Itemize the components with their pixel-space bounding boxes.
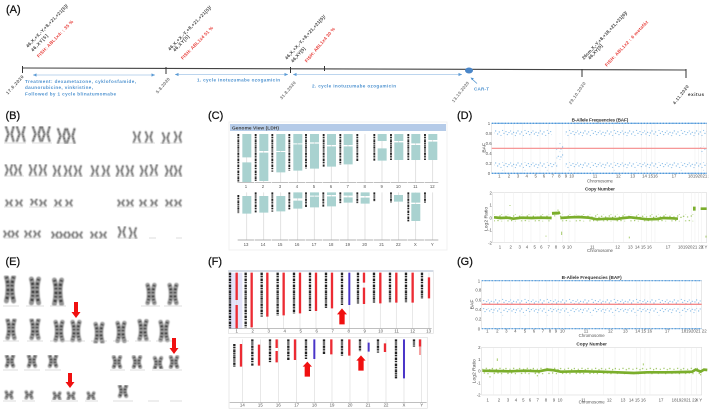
upper genome strip: 12 — [410, 328, 416, 333]
red arrow: group 8 — [72, 302, 80, 318]
BAF plot: 1 — [486, 328, 489, 333]
BAF plot: 4 — [525, 174, 528, 179]
copy number plot: 1 — [499, 245, 502, 250]
chromosome numbers: 8 — [363, 184, 366, 189]
genome view title: Genome View (LDH) — [232, 126, 279, 132]
BAF plot: 0.2 — [475, 317, 482, 322]
BAF plot: 0.4 — [475, 307, 482, 312]
copy number plot: 3 — [507, 397, 510, 402]
chromosome numbers: 22 — [396, 242, 401, 247]
chromosome numbers: 4 — [296, 184, 299, 189]
copy number plot: 13 — [628, 245, 633, 250]
BAF plot: 2 — [508, 174, 511, 179]
chromosome numbers: 18 — [329, 242, 334, 247]
chromosome numbers: 16 — [295, 242, 300, 247]
copy number plot: 7 — [536, 397, 539, 402]
karyotype and FISH note 1: FISH: ABL1x4: : 35 % — [36, 19, 74, 59]
BAF plot: 1 — [488, 121, 491, 126]
lower genome strip: 16 — [276, 402, 281, 407]
treatment text — [25, 79, 136, 96]
BAF plot: 0 — [478, 326, 481, 331]
timeline dates — [5, 74, 690, 105]
copy number plot: 9 — [553, 397, 556, 402]
BAF plot: 0.6 — [475, 297, 482, 302]
copy number plot: -2 — [477, 393, 481, 398]
copy number plot: 0 — [489, 215, 492, 220]
red arrow: chromosome 18 — [303, 362, 312, 377]
red arrow: group 21 — [66, 373, 74, 388]
copy number plot: Y — [699, 397, 702, 402]
lower genome strip: 20 — [348, 402, 353, 407]
upper genome strip — [228, 270, 433, 333]
teal copy number blocks — [242, 134, 437, 221]
lower genome strip — [229, 337, 427, 408]
BAF plot: 0.6 — [486, 141, 492, 146]
karyotype and FISH note 4: 26cm,X,-Y,+8,+18,+21,+21[6]/ — [581, 10, 629, 61]
karyotype and FISH note 1: 46,XY[5] — [30, 33, 49, 53]
genome view frame — [229, 122, 447, 250]
copy number plot: Log2 Ratio — [483, 207, 489, 231]
copy number plot: 12 — [615, 245, 621, 250]
copy number plot: 10 — [567, 245, 572, 250]
karyotype and FISH note 4 — [581, 10, 650, 68]
copy number plot: 7 — [547, 245, 550, 250]
chromosome numbers: X — [414, 242, 417, 247]
timeline dates: 17.6.2020 — [5, 74, 25, 95]
copy number plot: 6 — [540, 245, 543, 250]
karyogram baselines — [4, 143, 182, 238]
copy number plot: Chromosome — [579, 400, 605, 405]
cycle 1 label: 1. cycle inotuzumabe ozogamicin — [197, 78, 280, 82]
timeline dates: 13.10.2020 — [451, 80, 470, 103]
karyogram baselines — [3, 306, 182, 401]
BAF plot: 3 — [517, 174, 520, 179]
chromosome row 1 — [6, 277, 176, 304]
BAF plot: Chromosome — [579, 333, 605, 338]
BAF plot — [469, 275, 707, 338]
chromosome numbers: 7 — [346, 184, 349, 189]
copy number plot: Copy Number — [576, 341, 607, 346]
BAF plot: 1 — [478, 278, 481, 283]
chromosome row 2 — [8, 320, 167, 342]
copy number plot: 2 — [478, 345, 481, 350]
copy number plot: 17 — [659, 397, 664, 402]
red arrow: group 18 — [170, 338, 178, 354]
upper genome strip: 1 — [235, 328, 238, 333]
copy number plot: 2 — [489, 190, 492, 195]
copy number plot: 2 — [498, 397, 501, 402]
copy number plot: -1 — [477, 381, 481, 386]
copy number plot: 1 — [486, 397, 489, 402]
copy number plot: 17 — [666, 245, 671, 250]
BAF plot: 14 15 16 — [635, 328, 653, 333]
chromosome numbers: Y — [431, 242, 434, 247]
label D: (D) — [457, 110, 472, 122]
timeline dates: 29.10.2020 — [568, 81, 587, 105]
BAF plot: 0.8 — [475, 288, 482, 293]
copy number plot: 4 — [526, 245, 529, 250]
upper genome strip: 13 — [426, 328, 432, 333]
chromosome numbers: 11 — [413, 184, 418, 189]
CAR-T label and arrow: CAR-T — [474, 86, 489, 92]
copy number plot: -1 — [488, 228, 493, 233]
copy number plot: 2 — [509, 245, 512, 250]
copy number plot: X — [701, 245, 704, 250]
baselines — [238, 182, 438, 240]
chromosome numbers: 13 — [244, 242, 249, 247]
copy number plot: 12 — [607, 397, 612, 402]
upper genome strip: 7 — [331, 328, 334, 333]
chromosome numbers: 19 — [345, 242, 351, 247]
karyotype and FISH note 2: 46,XY[5] — [172, 34, 191, 53]
copy number plot: 10 — [558, 397, 563, 402]
copy number plot: 3 — [518, 245, 521, 250]
copy number plot: 18192021 22 — [672, 397, 698, 402]
chromosome numbers: 5 — [313, 184, 316, 189]
chromosome numbers: 17 — [312, 242, 317, 247]
label E: (E) — [6, 256, 20, 268]
lower genome strip: 19 — [330, 402, 335, 407]
copy number plot: 11 — [581, 397, 586, 402]
BAF plot: BAF — [482, 143, 488, 153]
copy number plot: 4 — [515, 397, 518, 402]
panel D: BAF and copy number plots — [457, 110, 709, 253]
BAF plot: 12 — [616, 174, 621, 179]
lower genome strip: 17 — [294, 402, 300, 407]
BAF plot: 9 — [555, 328, 558, 333]
karyotype and FISH note 3: 46,XY[5] — [290, 46, 307, 63]
upper genome strip: 2 — [251, 328, 254, 333]
chromosome numbers: 20 — [362, 242, 368, 247]
copy number plot — [483, 187, 708, 253]
upper genome strip: 10 — [378, 328, 384, 333]
chromosome numbers: 10 — [396, 184, 401, 189]
copy number plot: 11 — [590, 245, 595, 250]
karyotype and FISH note 2: FISH: ABL1x4 51 % — [180, 25, 214, 61]
label A: (A) — [6, 4, 21, 16]
BAF plot: B-Allele Frequencies (BAF) — [572, 117, 629, 122]
BAF plot: 5 — [524, 328, 527, 333]
BAF plot: 8 — [549, 328, 552, 333]
chromosome row 3 — [6, 199, 181, 206]
lower genome strip: 15 — [258, 402, 263, 407]
chromosome row 2 — [6, 165, 181, 176]
chromosome numbers: 15 — [278, 242, 283, 247]
timeline axis — [22, 68, 686, 70]
BAF plot: 0.8 — [486, 131, 492, 136]
copy number plot: 14 15 16 — [635, 245, 652, 250]
CAR-T marker dot — [465, 68, 473, 74]
karyotype and FISH note 3: FISH: ABL1x4 30 % — [304, 27, 336, 63]
red arrow: chromosome 21 — [356, 355, 366, 371]
copy number plot — [472, 341, 707, 405]
BAF plot: 17 — [672, 174, 677, 179]
chromosome numbers: 21 — [379, 242, 385, 247]
timeline ticks — [22, 66, 686, 78]
copy number plot: 0 — [478, 369, 481, 374]
chromosome numbers: 12 — [430, 184, 435, 189]
karyotype and FISH note 2: 46,X,+X,-Y,+8,+21,+21[5]/ — [167, 4, 213, 52]
chromosome numbers: 9 — [380, 184, 383, 189]
copy number plot: Chromosome — [587, 248, 614, 253]
BAF plot: 0.4 — [486, 151, 492, 156]
BAF plot: 6 — [533, 328, 536, 333]
upper genome strip: 9 — [363, 328, 366, 333]
karyotype and FISH note 1: 46,X,+X,-Y,+8,+21,+21[5]/ — [25, 3, 69, 49]
panel C: genome view LDH — [208, 110, 447, 250]
copy number plot: Log2 Ratio — [472, 359, 478, 383]
BAF plot: 18192021 22 — [681, 328, 707, 333]
label C: (C) — [208, 110, 223, 122]
chromosome numbers: 14 — [261, 242, 266, 247]
BAF plot: 10 — [560, 328, 565, 333]
chromosome row 3 — [7, 356, 177, 368]
lower genome strip: 14 — [240, 402, 245, 407]
karyotype and FISH note 4: FISH: ABL1x2 : 6 metafáz — [604, 19, 650, 68]
BAF plot: 12 — [608, 328, 613, 333]
chromosome numbers: 3 — [279, 184, 282, 189]
upper genome strip: 3 — [267, 328, 270, 333]
chromosome row 1 — [6, 127, 181, 143]
panel A: treatment timeline — [5, 3, 704, 105]
treatment text: daunorubicine, vinkristine, — [25, 85, 93, 90]
copy number plot: 5 — [533, 245, 536, 250]
BAF plot: 3 — [505, 328, 508, 333]
BAF plot: 7 — [551, 174, 554, 179]
panel G: BAF and copy number plots — [457, 256, 707, 405]
copy number plot: -2 — [488, 240, 493, 245]
copy number plot: 8 — [555, 245, 558, 250]
lower genome strip: 22 — [384, 402, 389, 407]
chromosome row 4 — [4, 227, 136, 238]
BAF plot: 1 — [498, 174, 501, 179]
copy number plot: 1 — [478, 357, 481, 362]
upper genome strip: 5 — [299, 328, 302, 333]
BAF plot: 9 — [565, 174, 568, 179]
BAF plot — [482, 117, 709, 183]
BAF plot: 11 — [584, 328, 589, 333]
copy number plot: 8 — [545, 397, 548, 402]
BAF plot: Chromosome — [587, 178, 614, 183]
genome view header bar — [230, 124, 446, 131]
label F: (F) — [208, 256, 222, 268]
BAF plot: 13 — [630, 174, 636, 179]
label B: (B) — [6, 110, 20, 122]
BAF plot: 7 — [542, 328, 545, 333]
copy number plot: 18192021 22 — [678, 245, 704, 250]
BAF plot: 5 — [534, 174, 537, 179]
BAF plot: 8 — [558, 174, 561, 179]
BAF plot: 17 — [665, 328, 670, 333]
BAF plot: BAF — [469, 300, 475, 309]
copy number plot: 6 — [529, 397, 532, 402]
copy number plot: 9 — [562, 245, 565, 250]
chromosome numbers: 6 — [330, 184, 333, 189]
lower genome strip: X — [403, 402, 406, 407]
BAF plot: 6 — [543, 174, 546, 179]
lower genome strip: 18 — [312, 402, 317, 407]
copy number plot: 5 — [522, 397, 525, 402]
upper genome strip: 4 — [283, 328, 286, 333]
upper genome strip: 11 — [394, 328, 399, 333]
BAF plot: 13 — [623, 328, 628, 333]
upper genome strip: 8 — [347, 328, 350, 333]
karyotype and FISH note 3: 46,X,+X,-Y,+8,+21,+21[5]/ — [284, 14, 327, 60]
BAF plot: 14 1516 — [642, 174, 658, 179]
chromosome ideograms — [238, 134, 425, 222]
chromosome numbers: 2 — [262, 184, 265, 189]
timeline dates: 4.11.2020 — [672, 84, 690, 105]
karyotype and FISH note 4: 46,XY[5] — [587, 43, 604, 61]
copy number plot: 13 — [621, 397, 626, 402]
BAF plot: 4 — [514, 328, 517, 333]
treatment span arrows — [33, 73, 462, 77]
timeline dates: 5.8.2020 — [155, 76, 171, 94]
copy number plot: 1 — [489, 203, 492, 208]
treatment text: Followed by 1 cycle blinatumomabe — [25, 92, 116, 96]
genome ideogram grid — [238, 134, 438, 247]
copy number plot: Copy Number — [585, 187, 615, 192]
BAF plot: 2 — [496, 328, 499, 333]
copy number plot: X — [696, 397, 699, 402]
chromosome numbers: 1 — [245, 184, 248, 189]
panel E: karyogram with red arrows — [3, 256, 182, 401]
treatment text: Treatment: dexametazone, cyklofosfamide, — [25, 79, 136, 84]
chromosome numbers — [244, 184, 435, 247]
cycle 2 label: 2. cycle inotuzumabe ozogamicin — [312, 84, 396, 88]
exitus label: exitus — [688, 92, 704, 97]
timeline dates: 31.8.2020 — [279, 80, 297, 100]
label G: (G) — [457, 256, 473, 268]
copy number plot: Y — [705, 245, 708, 250]
BAF plot: 10 — [569, 174, 575, 179]
upper genome strip: 6 — [315, 328, 318, 333]
lower genome strip: Y — [420, 402, 423, 407]
copy number plot: 14 15 16 — [629, 397, 646, 402]
red arrow: chromosome 8 — [337, 308, 347, 324]
BAF plot: B-Allele Frequencies (BAF) — [562, 275, 622, 280]
BAF plot: 0 — [488, 171, 491, 176]
chromosome row 4 — [6, 386, 126, 399]
panel F: genome view with red arrows — [208, 256, 433, 408]
panel B: karyogram — [4, 110, 182, 238]
BAF plot: 0.2 — [486, 161, 492, 166]
CAR-T label and arrow — [470, 78, 489, 92]
column guide lines — [247, 134, 433, 240]
BAF plot: 11 — [593, 174, 598, 179]
lower genome strip: 21 — [366, 402, 371, 407]
